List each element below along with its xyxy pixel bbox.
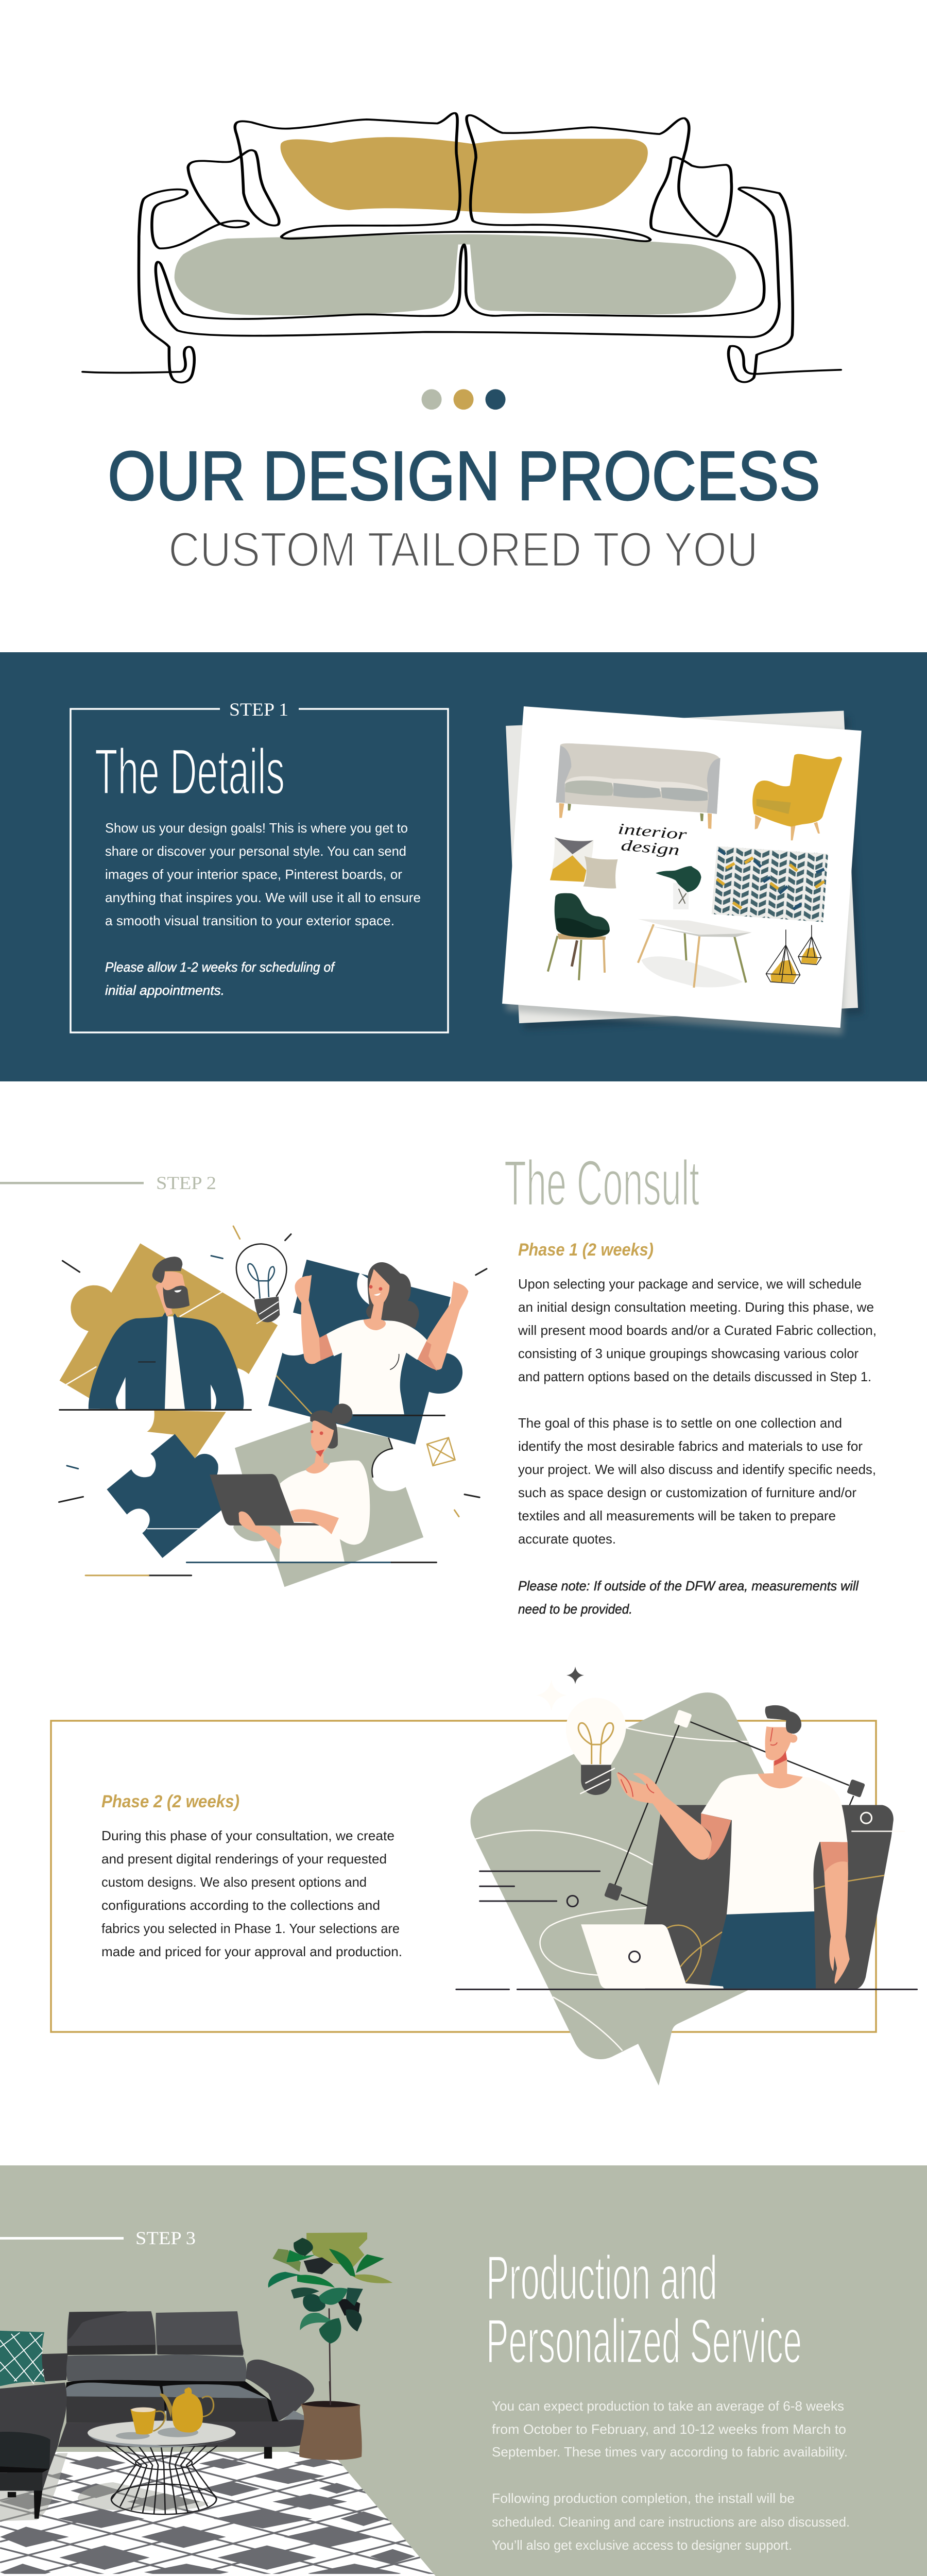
puzzle team illustration: [59, 1226, 487, 1587]
subtitle: CUSTOM TAILORED TO YOU: [168, 522, 758, 577]
moodboard pillows: [550, 837, 618, 889]
phase 1 body paragraph 2: [518, 1415, 876, 1547]
sage puzzle piece: [233, 1421, 423, 1587]
step 3 body paragraph 2: scheduled. Cleaning and care instructions are also discussed.: [492, 2514, 850, 2530]
step 3 body paragraph 2: Following production completion, the install will be: [492, 2490, 795, 2506]
step 3 body paragraph 1: [492, 2398, 848, 2460]
dark tablet panel: [644, 1805, 894, 1989]
fiddle leaf plant: [268, 2232, 392, 2404]
dark sectional sofa: [0, 2311, 321, 2519]
phase 1 heading: Phase 1 (2 weeks): [518, 1240, 654, 1260]
moodboard script caption: design: [620, 837, 680, 859]
step 1 body text: anything that inspires you. We will use it all to ensure: [105, 890, 421, 905]
cream laptop: [581, 1924, 724, 1989]
yellow cup: [130, 2408, 165, 2434]
step 2 label: STEP 2: [156, 1173, 216, 1193]
phase 1 body paragraph 1: Upon selecting your package and service, we will schedule: [518, 1276, 862, 1292]
step 3 body paragraph 2: [492, 2490, 850, 2553]
moodboard table: [638, 919, 752, 988]
phase 1 body paragraph 2: textiles and all measurements will be taken to prepare: [518, 1508, 836, 1523]
cream light bulb: [566, 1698, 626, 1795]
yellow teapot: [160, 2387, 214, 2432]
moodboard armchair: [752, 754, 842, 840]
three palette dots: [422, 389, 506, 410]
moodboard plant: [656, 866, 701, 909]
phase 2 body text: made and priced for your approval and production.: [101, 1944, 402, 1959]
phase 1 body paragraph 1: consisting of 3 unique groupings showcasing various color: [518, 1346, 859, 1361]
step 1 body text: images of your interior space, Pinterest boards, or: [105, 867, 402, 882]
phase 2 body text: custom designs. We also present options and: [101, 1874, 367, 1890]
phase 1 body paragraph 1: [518, 1276, 877, 1384]
phase 1 body paragraph 2: identify the most desirable fabrics and materials to use for: [518, 1438, 863, 1454]
step 1 body text: Show us your design goals! This is where you get to: [105, 820, 408, 836]
mood board illustration: [502, 706, 863, 1035]
panel: step 2: [0, 1148, 877, 1617]
phase 1 body paragraph 2: accurate quotes.: [518, 1531, 616, 1547]
man in suit: [89, 1257, 244, 1410]
moodboard green chair: [548, 893, 610, 980]
patterned rug: [0, 2371, 452, 2576]
phase 2 body text: [101, 1828, 402, 1959]
moodboard pendant lamps: [766, 925, 821, 984]
woman with raised arms: [295, 1262, 468, 1414]
step 1 scheduling note: Please allow 1-2 weeks for scheduling of: [105, 959, 336, 975]
designer with tablet illustration: [456, 1667, 917, 2086]
panel: step 3: [0, 2165, 927, 2576]
panel: phase 2: [51, 1667, 917, 2086]
small navy puzzle piece: [107, 1434, 221, 1558]
step 3 body paragraph 2: You’ll also get exclusive access to designer support.: [492, 2537, 792, 2553]
step 3 body paragraph 1: September. These times vary according to fabric availability.: [492, 2444, 848, 2460]
step 3 label: STEP 3: [135, 2228, 196, 2248]
moodboard script caption: interior: [617, 820, 688, 843]
step 3 body paragraph 1: You can expect production to take an average of 6-8 weeks: [492, 2398, 844, 2414]
step 1 label: STEP 1: [229, 699, 288, 720]
phase 2 body text: During this phase of your consultation, we create: [101, 1828, 394, 1843]
man in white t-shirt: [616, 1705, 850, 1989]
moodboard chevron rug: [712, 846, 828, 922]
gold pillow colour blob: [281, 137, 648, 213]
step 2 rule: [0, 1182, 144, 1184]
phase 2 body text: and present digital renderings of your requested: [101, 1851, 387, 1867]
phase 1 body paragraph 1: will present mood boards and/or a Curated Fabric collection,: [518, 1323, 877, 1338]
light bulb: [236, 1244, 286, 1324]
phase 2 body text: fabrics you selected in Phase 1. Your selections are: [101, 1921, 400, 1936]
moodboard sofa: [556, 743, 720, 829]
phase 1 body paragraph 1: an initial design consultation meeting. During this phase, we: [518, 1299, 874, 1315]
panel: step 1: [0, 652, 927, 1081]
phase 2 heading: Phase 2 (2 weeks): [101, 1792, 239, 1811]
step 3 body paragraph 1: from October to February, and 10-12 weeks from March to: [492, 2421, 846, 2437]
sage speech bubble: [471, 1692, 764, 2086]
heading: production and personalized service: Production and: [486, 2243, 717, 2313]
selection frame handles: [604, 1709, 865, 1906]
step 1 body text: share or discover your personal style. You can send: [105, 843, 406, 859]
phase 1 note: need to be provided.: [518, 1601, 632, 1617]
moodboard script caption: [617, 820, 688, 859]
step 1 body text: a smooth visual transition to your exterior space.: [105, 913, 394, 928]
sage seat colour blob: [175, 234, 736, 315]
heading: the consult: The Consult: [504, 1148, 699, 1219]
phase 1 note: [518, 1578, 859, 1617]
phase 1 body paragraph 2: such as space design or customization of furniture and/or: [518, 1485, 856, 1500]
teal lattice pillow: [0, 2331, 45, 2386]
step 1 scheduling note: initial appointments.: [105, 982, 225, 998]
title: OUR DESIGN PROCESS: [108, 437, 820, 515]
heading: production and personalized service: [486, 2243, 802, 2376]
single continuous sofa line: [83, 113, 840, 383]
motion lines and floor: [456, 1871, 917, 1989]
gold envelope icon: [427, 1437, 455, 1466]
gold puzzle piece: [60, 1243, 278, 1459]
phase 2 frame: [51, 1721, 876, 2032]
step 1 scheduling note: [105, 959, 336, 998]
living room illustration: [0, 2232, 452, 2576]
wire coffee table: [88, 2421, 235, 2514]
step 1 frame: [71, 709, 448, 1032]
accent ticks and rules: [59, 1226, 487, 1575]
plant pot: [299, 2381, 362, 2460]
heading: the details: The Details: [95, 736, 285, 808]
navy puzzle piece: [268, 1260, 462, 1445]
header illustration: line-drawn sofa: [83, 113, 840, 410]
step 1 body text: [105, 820, 421, 928]
phase 1 body paragraph 2: your project. We will also discuss and identify specific needs,: [518, 1462, 876, 1477]
phase 1 body paragraph 2: The goal of this phase is to settle on one collection and: [518, 1415, 842, 1431]
phase 1 note: Please note: If outside of the DFW area, measurements will: [518, 1578, 859, 1594]
sparkle stars: [536, 1667, 584, 1711]
phase 2 body text: configurations according to the collections and: [101, 1897, 380, 1913]
woman with laptop: [210, 1403, 370, 1562]
phase 1 body paragraph 1: and pattern options based on the details discussed in Step 1.: [518, 1369, 871, 1384]
step 3 rule: [0, 2237, 124, 2240]
